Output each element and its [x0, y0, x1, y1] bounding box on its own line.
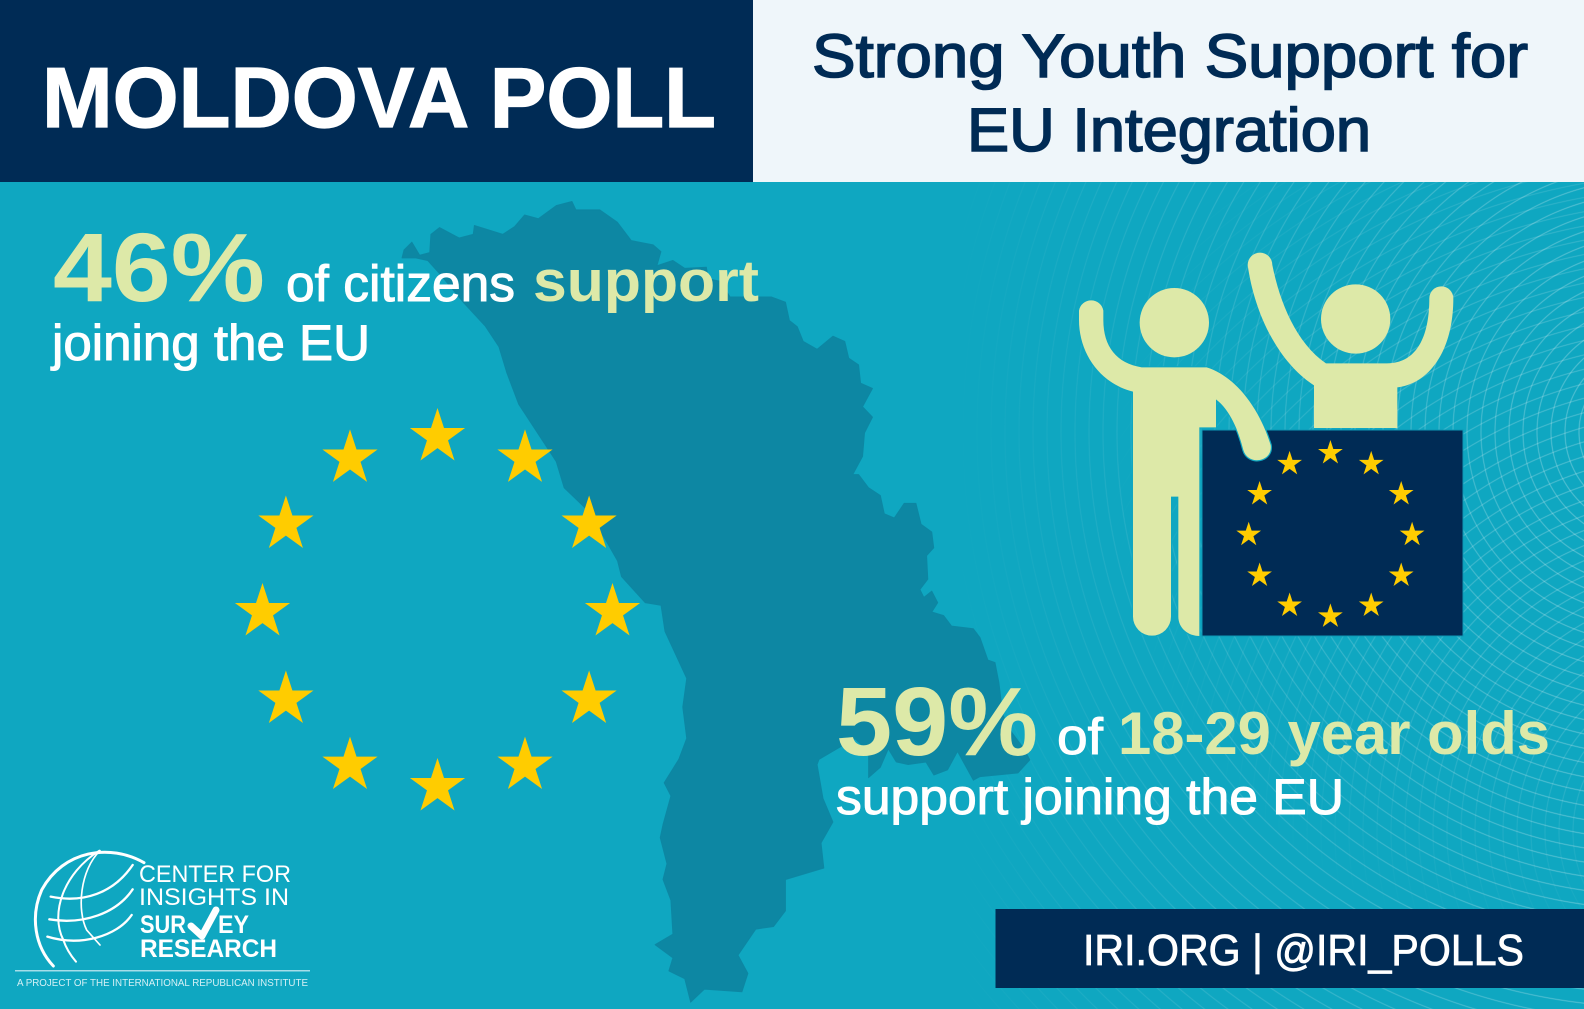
EU flag [1202, 430, 1463, 636]
logo: Center for Insights in Survey Research [15, 851, 310, 989]
icon: two people with EU flag [1079, 253, 1463, 636]
contact text: IRI.ORG | @IRI_POLLS [1083, 926, 1524, 975]
icon: check mark [191, 910, 216, 936]
statistic: 46% of citizens: joining the EU [50, 315, 370, 371]
icon: person holding flag [1079, 288, 1271, 636]
heading: Strong Youth Support for EU Integration: Strong Youth Support for [812, 22, 1528, 90]
icon: globe [35, 851, 144, 966]
header panel: poll label [0, 0, 753, 182]
logo wordmark: EY [218, 911, 249, 939]
EU star circle [235, 408, 640, 810]
statistic: 46% of citizens: of citizens [286, 255, 515, 312]
statistic: 46% of citizens [50, 213, 759, 371]
header panel: subtitle [753, 0, 1584, 182]
heading: Strong Youth Support for EU Integration: EU Integration [967, 96, 1371, 164]
logo wordmark [139, 861, 291, 963]
statistic: 46% of citizens: 46% [53, 213, 265, 322]
statistic: 59% of 18-29 year olds: support joining the EU [836, 769, 1344, 825]
statistic: 59% of 18-29 year olds [836, 667, 1550, 825]
heading: Moldova Poll: MOLDOVA POLL [42, 51, 716, 146]
statistic: 59% of 18-29 year olds: of [1057, 708, 1104, 765]
background line pattern [1018, 182, 1584, 1009]
footer bar: website and handle [996, 909, 1584, 988]
map of Moldova [402, 201, 1030, 1002]
logo wordmark: SUR [140, 911, 186, 939]
statistic: 59% of 18-29 year olds: 59% [836, 667, 1038, 776]
statistic: 46% of citizens: support [533, 249, 759, 314]
logo wordmark: CENTER FOR [139, 861, 291, 888]
logo tagline: A PROJECT OF THE INTERNATIONAL REPUBLICAN INSTITUTE [17, 978, 309, 989]
logo wordmark: RESEARCH [140, 935, 277, 963]
logo wordmark: INSIGHTS IN [139, 884, 289, 911]
icon: person behind flag [1248, 253, 1453, 428]
statistic: 59% of 18-29 year olds: 18-29 year olds [1118, 700, 1550, 767]
